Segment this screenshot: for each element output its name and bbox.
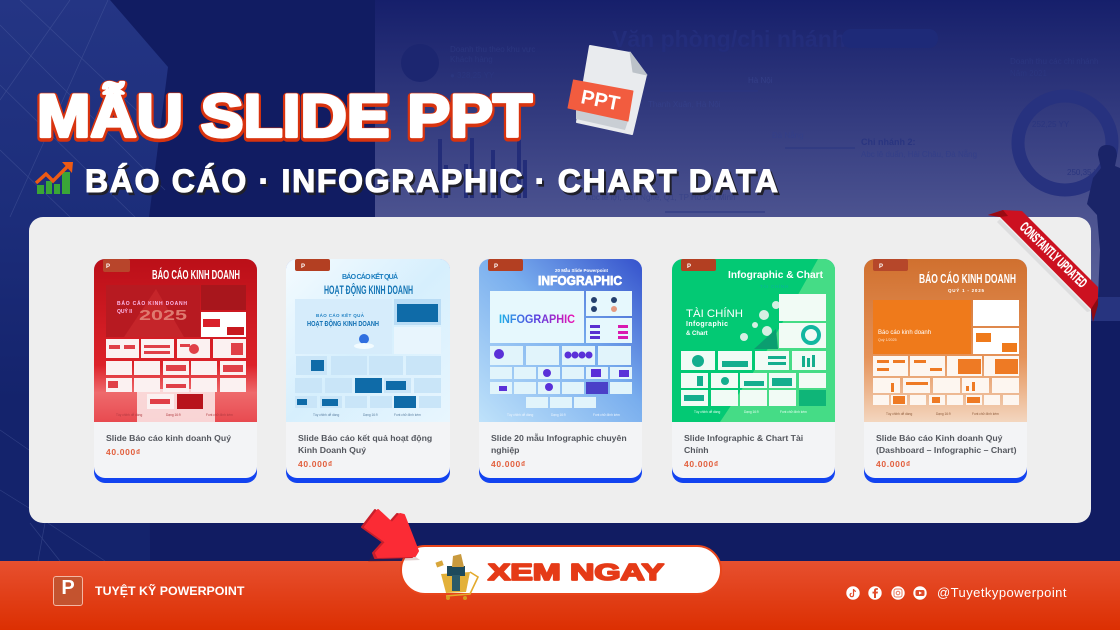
subtitle: BÁO CÁO · INFOGRAPHIC · CHART DATA	[87, 166, 780, 202]
subtitle: BÁO CÁO · INFOGRAPHIC · CHART DATA	[85, 163, 778, 199]
thumbnail: green finance: TÀI CHÍNH	[760, 283, 788, 289]
thumbnail: blue infographic	[479, 259, 642, 422]
faded branch labels	[586, 76, 977, 202]
card title	[298, 433, 432, 455]
footer bar	[0, 561, 1120, 630]
faded pill	[842, 29, 938, 48]
price: 40.000₫	[106, 447, 141, 457]
faded slide overlay at right: ● 328,25 YY	[450, 71, 495, 80]
card 4: finance infographic	[672, 259, 835, 483]
thumbnail: red: QUÝ II	[117, 308, 133, 315]
faded slide heading: Văn phòng/chi nhánh	[612, 26, 846, 52]
thumbnail: green finance: & Chart	[686, 331, 708, 337]
thumbnail: orange: Quý 1/2025	[878, 338, 897, 342]
thumbnail: red: Tùy chỉnh dễ dàng	[116, 412, 142, 417]
silhouette of person	[1087, 145, 1120, 297]
icon: youtube	[913, 586, 927, 600]
faded branch labels: Thanh Xuân, Hà Nội	[648, 100, 721, 109]
faded branch labels: Hà Nội	[748, 76, 773, 85]
card title: Chính	[684, 445, 709, 455]
thumbnail: green finance: P	[687, 264, 691, 270]
social handle: @Tuyetkypowerpoint	[937, 585, 1067, 600]
faded branch labels: Đà Nẵng	[772, 131, 804, 140]
card title: Slide Infographic & Chart Tài	[684, 433, 803, 443]
card title: Slide Báo cáo Kinh doanh Quý	[876, 433, 1002, 443]
faded slide overlay at right: Năm 2021	[1010, 69, 1047, 78]
icon: growth chart	[34, 162, 73, 194]
thumbnail: orange	[864, 259, 1027, 422]
thumbnail: orange: Báo cáo kinh doanh	[878, 330, 931, 336]
thumbnail: red: 2025	[139, 307, 187, 324]
card title: nghiệp	[491, 445, 519, 455]
button: xem ngay	[400, 545, 722, 595]
card 2: blue activity report	[286, 259, 450, 483]
thumbnail: red: P	[106, 264, 110, 270]
thumbnail: blue infographic: Dạng 16:9	[551, 413, 566, 417]
thumbnail: green finance: TÀI CHÍNH	[686, 307, 743, 320]
price: 40.000₫	[684, 459, 719, 469]
icon: shopping cart	[436, 554, 479, 600]
title: MẪU SLIDE PPT	[37, 82, 532, 150]
price: 40.000₫	[298, 459, 333, 469]
card 3: infographic	[479, 259, 642, 483]
thumbnail: blue infographic: P	[494, 264, 498, 270]
building at left	[0, 0, 168, 561]
title: MẪU SLIDE PPT	[37, 84, 532, 151]
thumbnail: light blue: BÁO CÁO KẾT QUẢ	[342, 271, 398, 281]
thumbnail: light blue: BÁO CÁO KẾT QUẢ	[316, 312, 365, 318]
thumbnail: light blue	[286, 259, 450, 422]
thumbnail: red: Dạng 16:9	[166, 413, 181, 417]
icon: tiktok	[846, 586, 860, 600]
thumbnail: orange: Dạng 16:9	[936, 412, 951, 416]
thumbnail: light blue: Tùy chỉnh dễ dàng	[313, 412, 339, 417]
card title: Kinh Doanh Quý	[298, 445, 366, 455]
thumbnail: blue infographic: Tùy chỉnh dễ dàng	[507, 412, 533, 417]
thumbnail: green finance: Dạng 16:9	[744, 410, 759, 414]
faded donut chart	[1018, 96, 1112, 190]
thumbnail: green finance: Infographic & Chart	[728, 270, 824, 281]
faded slide overlay at right: 252,25 YY	[1032, 120, 1070, 129]
faded branch labels: Chi nhánh 2:	[861, 137, 916, 147]
card title: (Dashboard – Infographic – Chart)	[876, 445, 1016, 455]
thumbnail: light blue: Dạng 16:9	[363, 413, 378, 417]
thumbnail: red: BÁO CÁO KINH DOANH	[117, 300, 187, 307]
price: 40.000₫	[876, 459, 911, 469]
thumbnail: orange: Font chữ đính kèm	[972, 412, 999, 416]
price: 40.000₫	[491, 459, 526, 469]
thumbnail: light blue: HOẠT ĐỘNG KINH DOANH	[307, 319, 379, 328]
faded branch labels: Abc lê lợi, Bến Nghé, Q1, TP Hồ Chí Minh	[586, 193, 735, 202]
card 5: orange quarterly report	[864, 259, 1027, 483]
thumbnail: orange: P	[879, 264, 883, 270]
faded slide overlay at right: Doanh thu các chi nhánh	[1010, 57, 1099, 66]
logo: Tuyệt Kỹ PowerPoint: P	[61, 577, 75, 599]
faded slide overlay at right: Doanh thu theo khu vực	[450, 45, 535, 54]
faded branch labels: Abc lê duẩn, Hải Châu, Đà Nẵng	[861, 150, 977, 159]
thumbnail: green finance: Tùy chỉnh dễ dàng	[694, 409, 720, 414]
card 1: red business report	[94, 259, 257, 483]
faded slide overlay at right: Khách hàng	[450, 55, 493, 64]
card title: Slide Báo cáo kết quả hoạt động	[298, 433, 432, 443]
card title	[876, 433, 1016, 455]
thumbnail: blue infographic: INFOGRAPHIC	[499, 312, 575, 326]
thumbnail: blue infographic: Font chữ đính kèm	[593, 413, 620, 417]
brand name: TUYỆT KỸ POWERPOINT	[95, 584, 244, 598]
thumbnail: light blue: P	[301, 264, 305, 270]
logo: Tuyệt Kỹ PowerPoint	[53, 576, 83, 606]
faded bar chart	[438, 138, 527, 198]
icon: instagram	[891, 586, 905, 600]
card title	[491, 433, 627, 455]
arrow pointing at button	[361, 509, 420, 562]
card title: Slide 20 mẫu Infographic chuyên	[491, 433, 627, 443]
button label: XEM NGAY	[488, 559, 664, 585]
thumbnail: green finance: Infographic	[686, 321, 728, 328]
thumbnail: green finance: Font chữ đính kèm	[780, 410, 807, 414]
thumbnail: orange: QUÝ 1 - 2025	[948, 287, 984, 293]
icon: PPT file: PPT	[579, 86, 621, 115]
thumbnail: green finance	[672, 259, 835, 422]
social icons	[846, 586, 927, 600]
panel: product showcase	[29, 217, 1091, 523]
thumbnail: red	[94, 259, 257, 422]
thumbnail: blue infographic: INFOGRAPHIC	[538, 273, 623, 288]
faded slide overlay at right	[375, 0, 1120, 321]
thumbnail: orange: Tùy chỉnh dễ dàng	[886, 411, 912, 416]
thumbnail: blue infographic: 20 Mẫu Slide Powerpoint	[555, 267, 609, 273]
ribbon: constantly updated	[988, 210, 1098, 322]
card title	[684, 433, 803, 455]
icon: facebook	[868, 586, 882, 600]
card title: Slide Báo cáo kinh doanh Quý	[106, 433, 231, 443]
faded slide overlay at right: 250,35 YY	[1067, 168, 1105, 177]
thumbnail: red: Font chữ đính kèm	[206, 413, 233, 417]
thumbnail: light blue: Font chữ đính kèm	[394, 413, 421, 417]
faded info icon	[401, 44, 439, 82]
icon: PPT file	[568, 45, 648, 135]
